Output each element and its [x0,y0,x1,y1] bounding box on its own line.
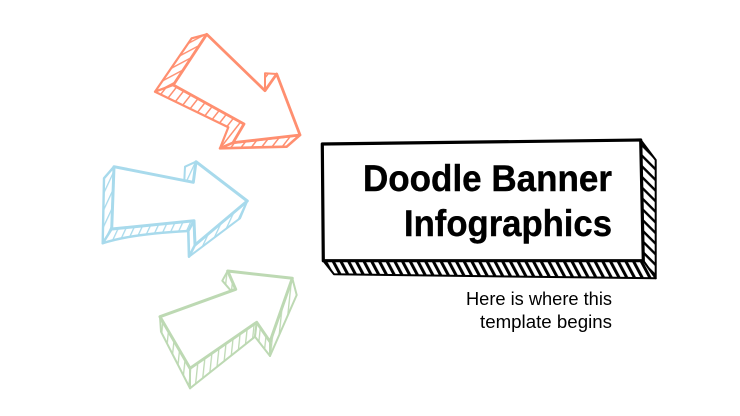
arrow: coral, pointing down-right [155,34,300,148]
banner: 3D doodle box [322,140,656,278]
banner side hatching [641,140,656,278]
arrow: green, pointing up-right [160,271,297,388]
subtitle [466,289,612,332]
title [363,158,612,244]
banner bottom hatching [323,261,656,278]
banner face [322,140,643,261]
title: Infographics [404,203,612,244]
arrow: blue, pointing right [103,162,247,257]
title: Doodle Banner [363,158,612,199]
subtitle: template begins [480,312,612,332]
subtitle: Here is where this [466,289,612,309]
